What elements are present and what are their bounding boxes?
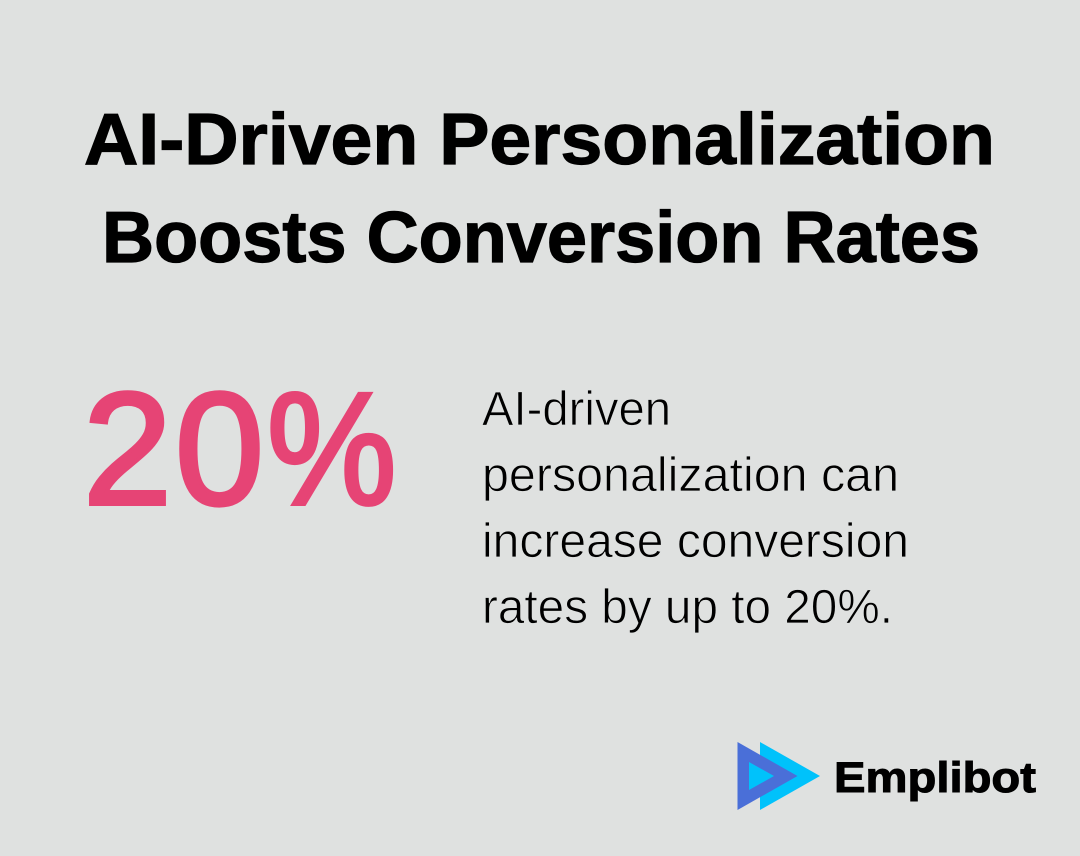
big stat: 20%: 20 (83, 359, 264, 538)
icon: play triangles (738, 742, 820, 810)
description text (482, 383, 909, 634)
title (84, 100, 995, 278)
big stat: 20%: % (267, 361, 396, 539)
big stat: 20% (83, 359, 396, 539)
description text: AI-driven (482, 383, 671, 436)
logo: Emplibot (738, 742, 1036, 810)
title: Boosts Conversion Rates (102, 198, 980, 278)
logo wordmark: Emplibot (834, 754, 1036, 802)
description text: rates by up to 20%. (482, 581, 893, 634)
title: AI-Driven Personalization (84, 100, 995, 180)
description text: personalization can (482, 449, 899, 502)
description text: increase conversion (482, 515, 909, 568)
